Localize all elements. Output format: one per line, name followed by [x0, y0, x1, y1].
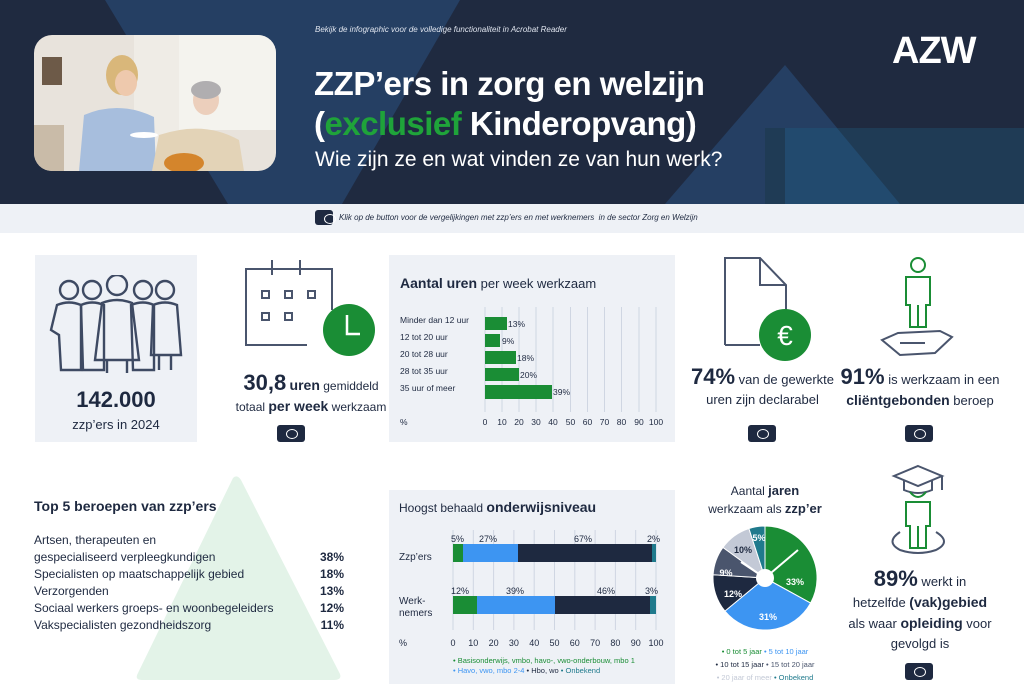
- list: Sociaal werkers groeps- en woonbegeleiders: [34, 601, 273, 615]
- bar chart: 100: [649, 417, 663, 427]
- list: Artsen, therapeuten en: [34, 533, 156, 547]
- pie chart: 31%: [759, 612, 777, 622]
- strip note: [315, 210, 698, 225]
- heading: Top 5 beroepen van zzp’ers: [34, 498, 217, 514]
- logo: AZW: [892, 30, 976, 72]
- stat: 74%: uren zijn declarabel: [706, 392, 819, 407]
- header background: [0, 0, 1024, 233]
- stacked bar chart: 46%: [597, 586, 615, 596]
- bar chart: [400, 307, 663, 427]
- bar chart: 10: [497, 417, 507, 427]
- heading: werkzaam als zzp’er: [708, 501, 822, 516]
- stacked bar chart: 30: [509, 638, 519, 648]
- pie chart: [714, 526, 817, 682]
- list: 12%: [320, 601, 344, 615]
- panel: onderwijsniveau: [389, 490, 675, 684]
- panel: clientgebonden: [841, 257, 999, 408]
- list: 18%: [320, 567, 344, 581]
- stacked bar chart: 3%: [645, 586, 658, 596]
- pie chart: • 0 tot 5 jaar • 5 tot 10 jaar: [722, 647, 809, 656]
- list: 38%: [320, 550, 344, 564]
- stat: 89%: [848, 566, 992, 651]
- stat: 89%: hetzelfde (vak)gebied: [853, 594, 987, 610]
- stacked bar chart: 39%: [506, 586, 524, 596]
- stat: 30,8 uren: totaal per week werkzaam: [236, 398, 386, 414]
- icon: calendar with clock: [245, 260, 375, 356]
- stacked bar chart: 50: [549, 638, 560, 648]
- stacked bar chart: [399, 530, 664, 675]
- stacked bar chart: 60: [570, 638, 580, 648]
- panel: 142.000 zzp'ers: [35, 255, 197, 442]
- icon: people: [50, 275, 182, 373]
- heading: Aantal jaren: [731, 483, 799, 498]
- stat: 91%: 91% is werkzaam in een: [841, 364, 999, 389]
- stacked bar chart: 70: [590, 638, 600, 648]
- stat: 142.000: zzp’ers in 2024: [72, 417, 160, 432]
- note text: Bekijk de infographic voor de volledige functionaliteit in Acrobat Reader: [315, 25, 567, 34]
- stacked bar chart: 40: [529, 638, 539, 648]
- stacked bar chart: 20: [489, 638, 499, 648]
- stacked bar chart: 5%: [451, 534, 464, 544]
- chart title: Hoogst behaald onderwijsniveau: [399, 499, 596, 515]
- bar chart: 18%: [517, 353, 534, 363]
- stat: 89%: als waar opleiding voor: [848, 615, 992, 631]
- bar chart: Minder dan 12 uur: [400, 315, 469, 325]
- stacked bar chart: %: [399, 638, 407, 648]
- icon: document with euro: €: [777, 320, 793, 351]
- pie chart: • 20 jaar of meer • Onbekend: [717, 673, 813, 682]
- list: Verzorgenden: [34, 584, 109, 598]
- panel: jaren werkzaam pie: [708, 483, 822, 682]
- pie chart: 12%: [724, 589, 742, 599]
- pie chart: 33%: [786, 577, 804, 587]
- bar chart: 50: [566, 417, 575, 427]
- bar chart: 35 uur of meer: [400, 383, 455, 393]
- list: Vakspecialisten gezondheidszorg: [34, 618, 211, 632]
- title: ZZP’ers in zorg en welzijn: [314, 65, 704, 102]
- stacked bar chart: 27%: [479, 534, 497, 544]
- stat: 74%: 74% van de gewerkte: [691, 364, 834, 389]
- bar chart: 30: [531, 417, 541, 427]
- heading: [708, 483, 822, 516]
- bar chart: 20 tot 28 uur: [400, 349, 448, 359]
- panel: declarabel: [691, 257, 834, 407]
- icon: document with euro: [724, 257, 811, 361]
- decorative triangle: [136, 476, 340, 680]
- bar chart: 80: [617, 417, 626, 427]
- bar chart: 20%: [520, 370, 537, 380]
- panel: opleiding: [848, 464, 992, 651]
- stacked bar chart: 2%: [647, 534, 660, 544]
- stacked bar chart: • Basisonderwijs, vmbo, havo-, vwo-onderbouw, mbo 1: [453, 656, 635, 665]
- bar chart: 90: [634, 417, 644, 427]
- bar chart: 9%: [502, 336, 515, 346]
- stat: 74%: [691, 364, 834, 407]
- stacked bar chart: • Havo, vwo, mbo 2-4 • Hbo, wo • Onbekend: [453, 666, 600, 675]
- bar chart: 20: [514, 417, 524, 427]
- button: [277, 425, 305, 442]
- icon: graduate: [892, 464, 945, 554]
- stat: 91%: cliëntgebonden beroep: [846, 392, 994, 408]
- list: Specialisten op maatschappelijk gebied: [34, 567, 244, 581]
- bar chart: 28 tot 35 uur: [400, 366, 448, 376]
- list: 11%: [321, 618, 344, 632]
- stacked bar chart: 0: [450, 638, 456, 648]
- stacked bar chart: 12%: [451, 586, 469, 596]
- panel: hours chart: [389, 255, 675, 442]
- bar chart: 70: [600, 417, 609, 427]
- pie chart: 9%: [719, 568, 733, 578]
- stat: 142.000: 142.000: [76, 387, 156, 412]
- panel: top 5 beroepen: [34, 476, 344, 680]
- stat: 30,8 uren: [236, 370, 386, 414]
- stacked bar chart: 80: [610, 638, 620, 648]
- bar chart: 0: [483, 417, 488, 427]
- stacked bar chart: 90: [631, 638, 641, 648]
- stacked bar chart: 10: [468, 638, 478, 648]
- stacked bar chart: 67%: [574, 534, 592, 544]
- icon: person on hand: [880, 257, 954, 356]
- title: (exclusief Kinderopvang): [314, 105, 696, 142]
- bar chart: %: [400, 417, 408, 427]
- bar chart: 60: [583, 417, 592, 427]
- strip note: Klik op de button voor de vergelijkingen met zzp’ers en met werknemers in de sector Zorg en Welzijn: [339, 213, 698, 222]
- pie chart: • 10 tot 15 jaar • 15 tot 20 jaar: [715, 660, 815, 669]
- pie chart: 5%: [752, 533, 766, 543]
- stat: 91%: [841, 364, 999, 408]
- stat: 142.000: [72, 387, 160, 432]
- list: gespecialiseerd verpleegkundigen: [34, 550, 215, 564]
- stacked bar chart: 100: [648, 638, 664, 648]
- panel: hours per week: [236, 260, 386, 414]
- stat: 30,8 uren: 30,8 uren gemiddeld: [243, 370, 379, 395]
- stacked bar chart: Zzp’ers: [399, 552, 432, 563]
- list: 13%: [320, 584, 344, 598]
- bar chart: 12 tot 20 uur: [400, 332, 448, 342]
- stat: 89%: 89% werkt in: [874, 566, 966, 591]
- stacked bar chart: Werk-: [399, 596, 425, 607]
- chart title: Aantal uren per week werkzaam: [400, 275, 596, 291]
- photo: [34, 35, 276, 171]
- subtitle: Wie zijn ze en wat vinden ze van hun werk?: [315, 148, 722, 171]
- stacked bar chart: nemers: [399, 608, 432, 619]
- bar chart: 39%: [553, 387, 570, 397]
- list: [34, 533, 344, 632]
- bar chart: 13%: [508, 319, 525, 329]
- title: [314, 65, 704, 142]
- bar chart: 40: [548, 417, 558, 427]
- stat: 89%: gevolgd is: [891, 636, 949, 651]
- pie chart: 10%: [734, 545, 752, 555]
